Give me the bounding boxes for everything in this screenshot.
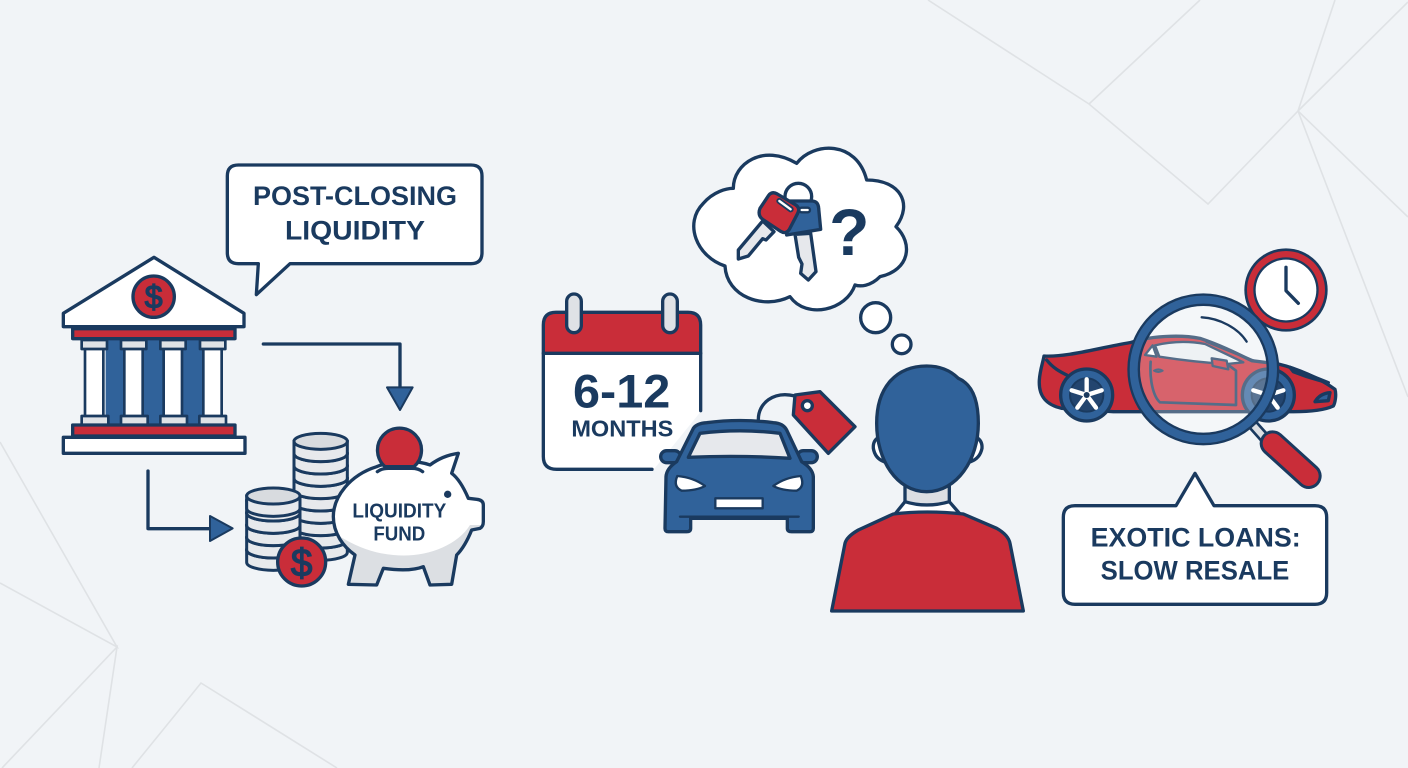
icon: thought cloud with keys: ? [829,195,869,269]
callout: post-closing liquidity: LIQUIDITY [285,215,425,245]
icon: bank dollar coin [133,276,174,317]
icon: person from behind [832,366,1023,611]
callout: exotic loans slow resale [1063,473,1327,604]
callout: post-closing liquidity: POST-CLOSING [253,181,457,211]
icon: red dollar coin [278,538,326,586]
panel: exotic loans slow resale [1039,248,1336,604]
icon: rear wheel [1061,369,1113,421]
icon: calendar: MONTHS [571,416,673,442]
arrow: bank to piggy bank [263,344,413,410]
icon: red sports car [1039,336,1336,421]
icon: magnifying glass [1134,300,1309,476]
icon: blue car front view [661,420,817,532]
icon: coin entering slot [377,428,423,472]
arrow: bank to coin stacks [148,471,233,541]
callout: exotic loans slow resale: SLOW RESALE [1101,555,1289,585]
icon: car keys [738,183,821,280]
icon: thought cloud with keys [694,148,911,354]
icon: piggy bank: FUND [373,524,425,546]
icon: calendar: 6-12 [573,365,670,418]
icon: piggy bank [327,428,487,585]
icon: bank building [63,257,245,453]
icon: short coin stack [247,488,300,570]
icon: price tag [758,392,855,453]
panel: post-closing liquidity [63,165,487,586]
callout: post-closing liquidity [227,165,482,295]
callout: exotic loans slow resale: EXOTIC LOANS: [1091,523,1301,553]
icon: red dollar coin: $ [291,542,312,585]
icon: clock [1244,248,1328,332]
panel: resale timeline and buyer [543,148,1023,611]
icon: tall coin stack [294,433,347,560]
icon: calendar [543,294,701,470]
icon: piggy bank: LIQUIDITY [352,501,446,523]
icon: front wheel [1242,369,1294,421]
icon: bank dollar coin: $ [145,279,163,315]
